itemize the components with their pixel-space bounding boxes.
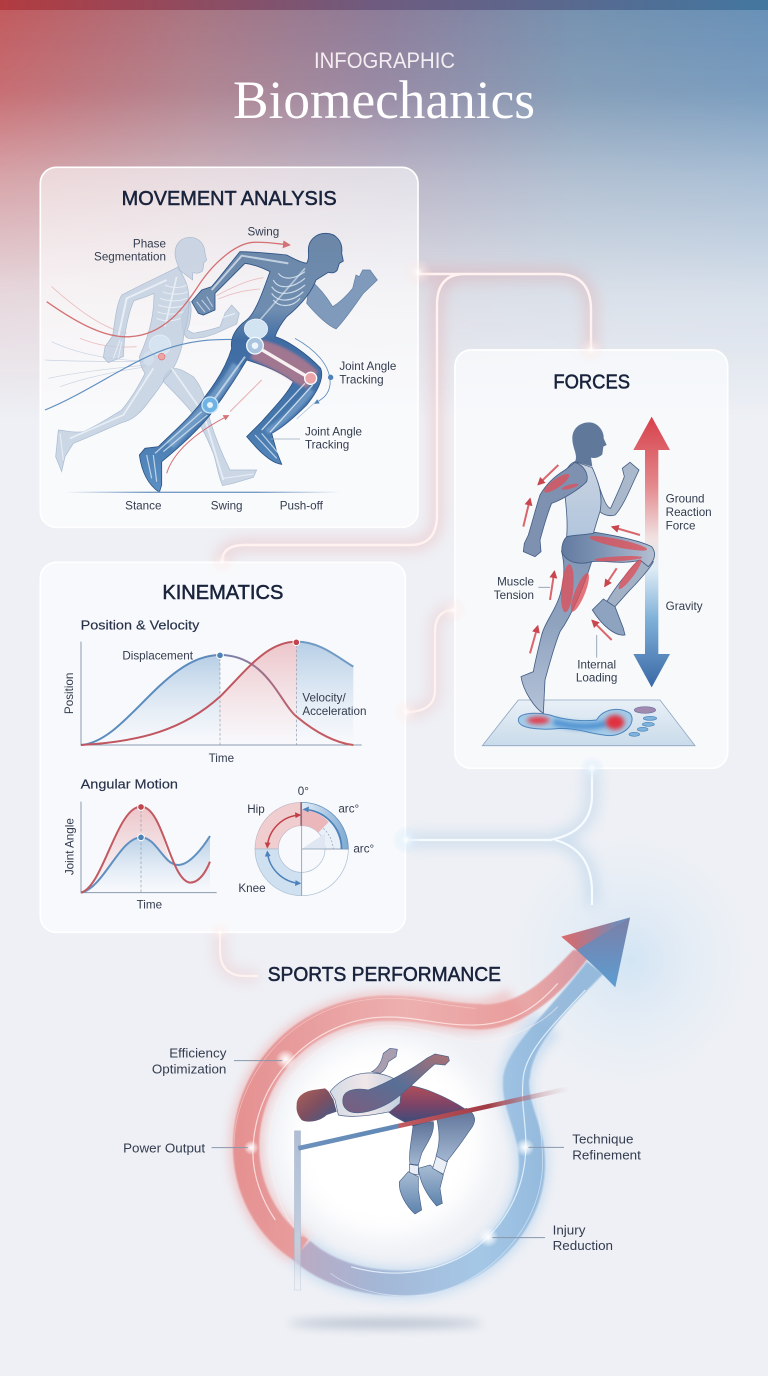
chart: angular motion: Time bbox=[137, 899, 162, 912]
red force arrows bbox=[523, 465, 640, 653]
labels: Joint Angle bbox=[339, 360, 396, 373]
panel card bbox=[455, 350, 728, 768]
connector: forces and kinematics to sports performance bbox=[406, 768, 592, 905]
chart: position and velocity bbox=[63, 639, 366, 765]
labels: Loading bbox=[576, 672, 617, 685]
annotation arrows bbox=[65, 338, 340, 492]
ribbon highlights bbox=[234, 983, 585, 1296]
labels: Segmentation bbox=[94, 251, 166, 264]
callout: power output: Power Output bbox=[123, 1141, 205, 1155]
labels: Muscle bbox=[497, 576, 534, 589]
chart: angular motion bbox=[63, 802, 217, 912]
ground reaction and gravity arrow bbox=[633, 417, 670, 687]
panel: kinematics bbox=[40, 562, 405, 932]
ghost runner bbox=[56, 237, 257, 486]
ribbon glow bbox=[246, 1003, 547, 1283]
title: biomechanics: Biomechanics bbox=[233, 70, 535, 130]
motion trails bbox=[45, 278, 263, 387]
labels: Swing bbox=[247, 226, 279, 239]
pressure mat bbox=[482, 700, 695, 746]
muscle highlights bbox=[542, 471, 648, 613]
chart: position and velocity: Displacement bbox=[122, 649, 194, 662]
high jump post bbox=[294, 1131, 301, 1290]
chart: position and velocity: Position bbox=[63, 673, 76, 714]
kicker: infographic: INFOGRAPHIC bbox=[314, 48, 455, 73]
labels: Tension bbox=[494, 589, 534, 602]
jumper bbox=[297, 1048, 475, 1214]
body silhouette bbox=[139, 233, 343, 492]
skeleton bbox=[147, 256, 317, 482]
chart: joint angle dial: Knee bbox=[238, 882, 266, 895]
heading: MOVEMENT ANALYSIS bbox=[122, 187, 337, 210]
panel card bbox=[40, 167, 418, 527]
title block bbox=[233, 48, 535, 130]
labels: Ground bbox=[666, 493, 705, 506]
chart: angular motion: Joint Angle bbox=[63, 818, 76, 875]
ground shadow bbox=[289, 1319, 482, 1328]
chart: joint angle dial: arc° bbox=[353, 842, 374, 855]
subheading: position and velocity: Position & Velocity bbox=[81, 617, 200, 632]
callout: technique refinement bbox=[528, 1132, 641, 1162]
labels: Gravity bbox=[666, 600, 703, 613]
labels: Tracking bbox=[305, 439, 349, 452]
subheading: angular motion: Angular Motion bbox=[81, 777, 178, 792]
ribbon body bbox=[246, 950, 603, 1283]
callout: injury reduction bbox=[492, 1223, 613, 1253]
labels: Stance bbox=[125, 500, 161, 513]
connector: kinematics to sports performance title bbox=[220, 932, 258, 976]
chart: joint angle dial: 0° bbox=[298, 785, 309, 798]
panel: movement analysis bbox=[40, 167, 418, 527]
heading: SPORTS PERFORMANCE bbox=[268, 963, 501, 986]
leader lines bbox=[538, 587, 597, 658]
labels and heading bbox=[123, 963, 641, 1253]
labels: Tracking bbox=[339, 373, 384, 386]
labels bbox=[494, 493, 712, 685]
labels: Internal bbox=[577, 658, 616, 671]
callout: injury reduction: Reduction bbox=[553, 1238, 613, 1253]
connector: movement analysis to forces and kinematics bbox=[222, 274, 591, 562]
runner body bbox=[521, 422, 655, 713]
connector junction flares bbox=[210, 258, 604, 942]
runner figure with muscles and force arrows bbox=[521, 422, 655, 713]
labels: Force bbox=[666, 519, 695, 532]
panel: forces bbox=[455, 350, 728, 768]
chart: position and velocity: Velocity/ bbox=[302, 692, 347, 705]
performance ribbon bbox=[234, 917, 630, 1328]
labels: Joint Angle bbox=[305, 425, 362, 438]
front runner bbox=[139, 233, 377, 492]
trail curves bbox=[45, 242, 289, 410]
callout: efficiency optimization bbox=[152, 1046, 282, 1076]
chart: position and velocity: Time bbox=[209, 752, 234, 765]
chart: joint angle dial: arc° bbox=[338, 803, 359, 816]
labels: Phase bbox=[133, 237, 166, 250]
callout: power output bbox=[123, 1141, 248, 1155]
labels: Push-off bbox=[280, 500, 324, 513]
page background bbox=[0, 0, 768, 1036]
labels bbox=[94, 226, 396, 513]
chart: joint angle dial: Hip bbox=[247, 803, 265, 816]
callout: efficiency optimization: Optimization bbox=[152, 1062, 226, 1076]
ribbon arrowhead bbox=[561, 917, 630, 987]
thigh highlight bbox=[250, 340, 318, 388]
callout: technique refinement: Refinement bbox=[572, 1148, 641, 1162]
heading: FORCES bbox=[553, 370, 630, 393]
crossbar bbox=[298, 1088, 570, 1148]
labels: Reaction bbox=[666, 506, 712, 519]
chart: joint angle dial bbox=[238, 785, 374, 896]
center glow bbox=[282, 1040, 489, 1240]
section: sports performance bbox=[123, 917, 641, 1328]
panel card bbox=[40, 562, 405, 932]
callout: efficiency optimization: Efficiency bbox=[169, 1046, 227, 1060]
callout glints bbox=[244, 1049, 535, 1247]
connector: forces to kinematics bbox=[406, 610, 454, 712]
labels: Swing bbox=[211, 500, 243, 513]
jumper and crossbar bbox=[294, 1048, 570, 1290]
front arm bbox=[307, 270, 377, 329]
heading: KINEMATICS bbox=[162, 581, 283, 604]
chart: position and velocity: Acceleration bbox=[302, 705, 366, 718]
callout: technique refinement: Technique bbox=[572, 1132, 633, 1146]
callout: injury reduction: Injury bbox=[553, 1223, 586, 1237]
